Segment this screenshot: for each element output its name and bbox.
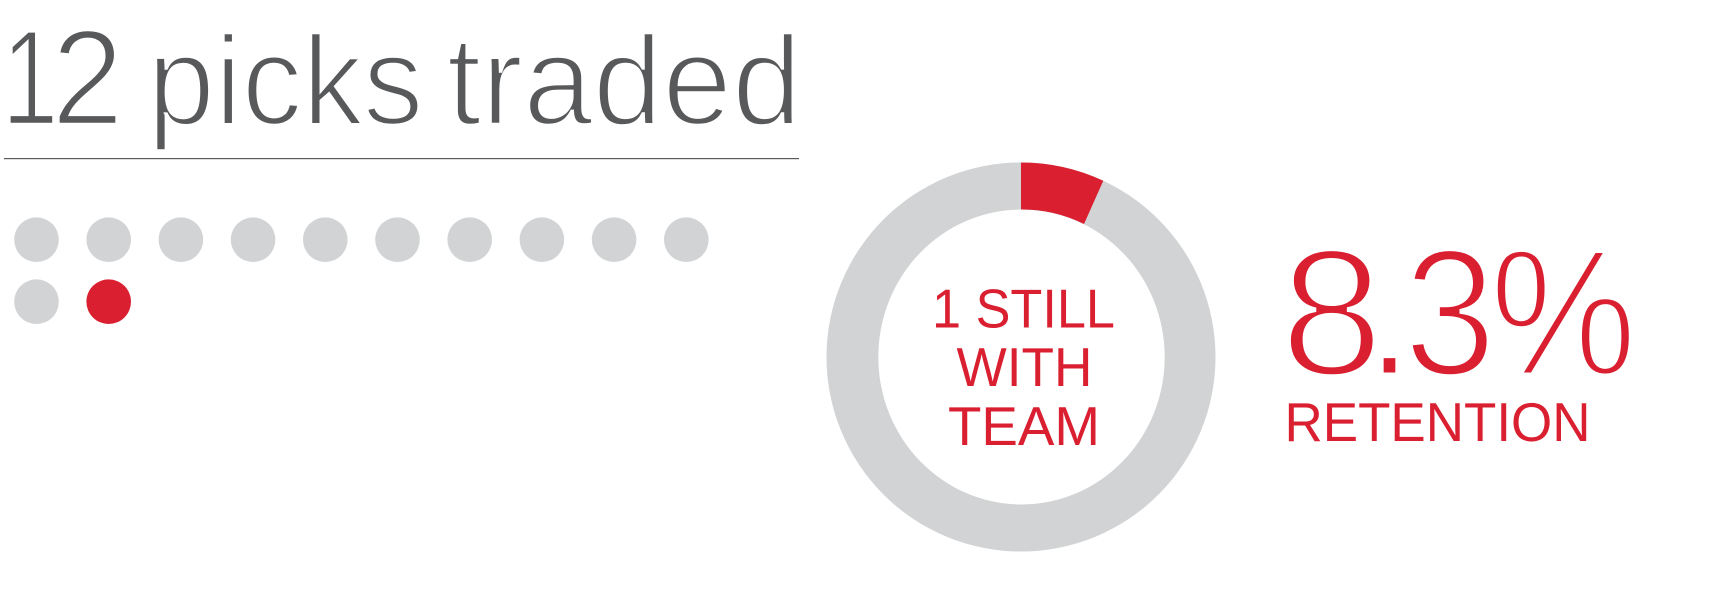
retention label: RETENTION [1284,391,1590,453]
title [2,2,802,154]
title: 2 [52,2,124,154]
donut chart [826,162,1216,552]
title: traded [447,10,802,152]
dot grid: 12 picks [14,217,709,324]
title: 1 [2,2,58,154]
retention percentage [1280,212,1637,414]
retention percentage: . [1366,212,1414,414]
donut label: WITH [956,336,1092,398]
donut label: TEAM [948,395,1100,457]
title: picks [148,10,424,152]
retention percentage: % [1490,212,1637,414]
donut label [932,278,1115,457]
retention percentage: 8 [1280,212,1383,414]
retention percentage: 3 [1404,212,1496,414]
donut label: 1 STILL [932,278,1115,340]
